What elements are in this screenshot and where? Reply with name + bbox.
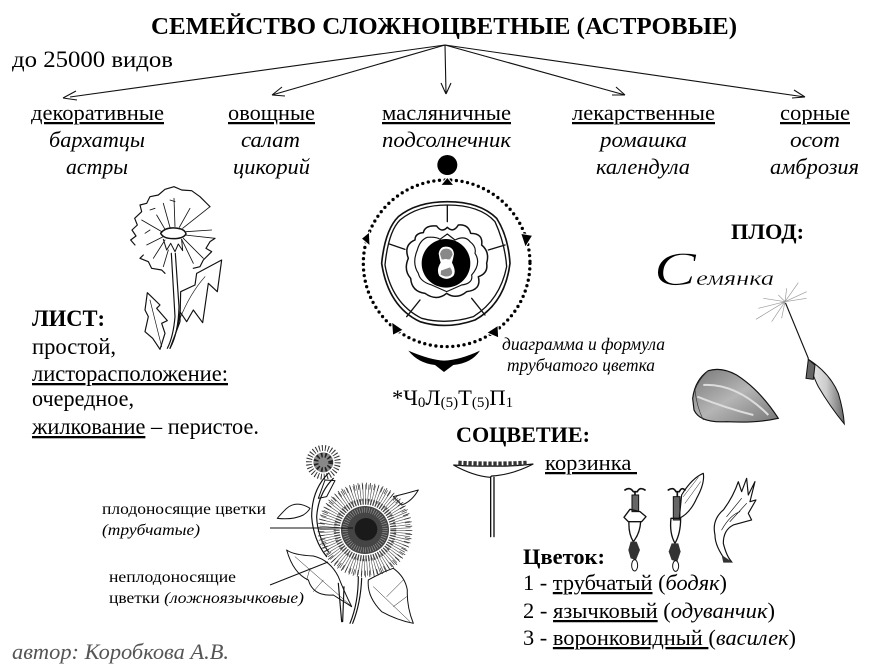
category: vegetable: цикорий xyxy=(233,154,311,179)
corolla outline xyxy=(382,202,510,325)
leaf description: простой, xyxy=(32,334,116,359)
sterile flower label xyxy=(109,562,328,607)
floral formula: (5) xyxy=(472,395,489,411)
axis dot xyxy=(437,155,457,175)
icon: sunflower seed xyxy=(693,369,778,422)
floral formula: *Ч xyxy=(392,385,418,410)
inflorescence type: корзинка xyxy=(545,450,637,475)
floral formula: Т xyxy=(458,385,472,410)
category: decorative: астры xyxy=(66,154,128,179)
sepal triangles xyxy=(361,177,533,338)
sterile flower label: цветки (ложноязычковые) xyxy=(109,590,304,607)
category: weeds: сорные xyxy=(780,100,850,125)
floral formula: (5) xyxy=(441,395,458,411)
category: decorative xyxy=(31,100,164,179)
category: decorative: бархатцы xyxy=(49,127,145,152)
title: СЕМЕЙСТВО СЛОЖНОЦВЕТНЫЕ (АСТРОВЫЕ) xyxy=(151,12,737,40)
leaf description: ЛИСТ: xyxy=(32,306,105,331)
stems and leaves xyxy=(312,473,362,623)
fruit heading: ПЛОД: xyxy=(731,219,804,244)
category: medicinal: календула xyxy=(596,154,690,179)
sterile flower label: неплодоносящие xyxy=(109,569,236,586)
bract xyxy=(408,351,480,372)
category: weeds xyxy=(770,100,859,179)
category: medicinal: ромашка xyxy=(598,127,687,152)
calyx dotted ring xyxy=(363,180,530,347)
leaf description xyxy=(31,306,259,439)
flower types list xyxy=(523,544,796,650)
category: vegetable: овощные xyxy=(228,100,315,125)
floral formula: 0 xyxy=(418,395,425,411)
bud xyxy=(309,448,338,477)
flower diagram xyxy=(361,155,533,372)
category: oil xyxy=(382,100,511,152)
category: oil: подсолнечник xyxy=(382,127,511,152)
flower types list: Цветок: xyxy=(523,544,605,569)
floral formula: П xyxy=(489,385,506,410)
category: vegetable: салат xyxy=(241,127,300,152)
inflorescence heading: СОЦВЕТИЕ: xyxy=(456,422,590,447)
anthers and style xyxy=(422,239,470,288)
leaf description: очередное, xyxy=(32,386,134,411)
diagram caption xyxy=(502,334,665,375)
icon: dandelion xyxy=(131,187,222,349)
author credit: автор: Коробкова А.В. xyxy=(12,639,229,664)
category: weeds: осот xyxy=(790,127,840,152)
leaf description: жилкование – перистое. xyxy=(31,414,259,439)
flower types list: 3 - воронковидный (василек) xyxy=(523,625,796,650)
disc xyxy=(341,506,389,554)
flower icons xyxy=(624,473,756,571)
fruit name script: С емянка xyxy=(654,243,774,296)
category: vegetable xyxy=(228,100,315,179)
category: medicinal xyxy=(572,100,715,179)
floral formula: 1 xyxy=(506,395,513,411)
leaf description: листорасположение: xyxy=(32,361,228,386)
diagram caption: диаграмма и формула xyxy=(502,334,665,354)
fertile flower label: плодоносящие цветки xyxy=(102,501,266,518)
arrows to categories xyxy=(63,45,805,100)
flower 1: tubular xyxy=(624,489,646,571)
flower 3: funnel xyxy=(714,478,756,563)
category: medicinal: лекарственные xyxy=(572,100,715,125)
dandelion seed head xyxy=(131,187,215,273)
ray petals xyxy=(328,493,402,567)
diagram caption: трубчатого цветка xyxy=(507,355,655,375)
icon: basket inflorescence xyxy=(453,463,533,537)
species count: до 25000 видов xyxy=(12,47,173,72)
category: decorative: декоративные xyxy=(31,100,164,125)
floral formula: Л xyxy=(425,385,441,410)
icon: sunflower xyxy=(277,448,418,623)
stamen lobes xyxy=(406,225,488,297)
icon: achene with pappus xyxy=(756,283,844,424)
flower types list: 2 - язычковый (одуванчик) xyxy=(523,598,775,623)
category: weeds: амброзия xyxy=(770,154,859,179)
flower 2: ligulate xyxy=(668,473,704,571)
fertile flower label xyxy=(102,501,353,539)
fertile flower label: (трубчатые) xyxy=(102,522,200,539)
category: oil: масляничные xyxy=(382,100,511,125)
dandelion stem and leaves xyxy=(145,253,222,349)
flower types list: 1 - трубчатый (бодяк) xyxy=(523,570,727,595)
